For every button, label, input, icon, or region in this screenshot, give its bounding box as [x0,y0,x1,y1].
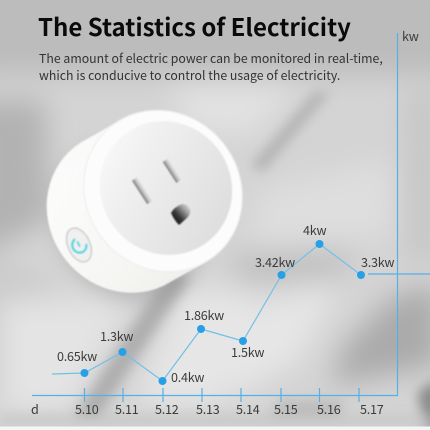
plug face [73,94,259,282]
axis labels: 5.14 [236,399,260,418]
data labels: 3.3kw [361,252,394,271]
plug body [14,86,262,325]
data labels: 1.5kw [231,342,264,361]
data labels: 1.86kw [184,305,224,324]
data labels: 0.65kw [57,346,97,365]
axis labels: d [31,399,39,418]
data labels [57,220,394,386]
plug front rim [51,78,275,304]
axis labels: kw [402,26,419,45]
smart plug [14,78,275,333]
data labels: 1.3kw [100,326,133,345]
axis labels: 5.11 [115,399,139,418]
axis labels: 5.10 [75,399,99,418]
title: The Statistics of Electricity [38,8,351,43]
axis labels: 5.16 [317,399,341,418]
outlet slots [132,158,190,225]
data line [52,244,361,381]
axis labels: 5.17 [360,399,384,418]
data labels: 4kw [303,220,326,239]
axis labels: 5.15 [274,399,298,418]
data labels: 0.4kw [171,367,204,386]
power button [61,224,97,266]
axis labels: 5.12 [155,399,179,418]
axis labels: 5.13 [196,399,220,418]
description text [39,49,383,84]
description text: which is conducive to control the usage of electricity. [39,66,340,84]
description text: The amount of electric power can be monitored in real-time, [39,49,383,67]
data labels: 3.42kw [255,252,295,271]
data points [80,240,365,385]
axes [32,33,430,402]
